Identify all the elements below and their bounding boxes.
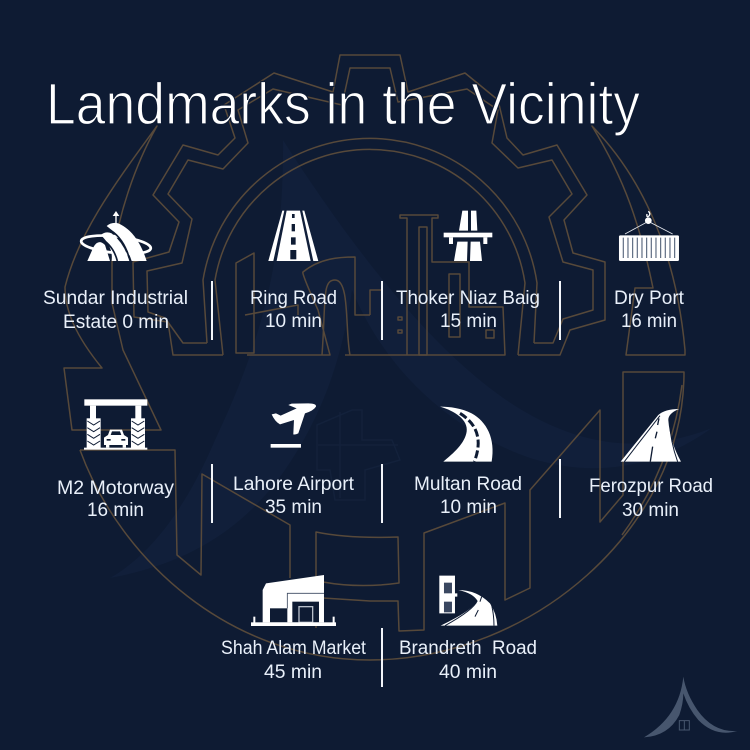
icon: Multan curved road bbox=[440, 407, 493, 462]
label: Sundar Industrial Estate bbox=[43, 288, 188, 333]
icon: M2 motorway toll bbox=[84, 399, 147, 450]
label: Dry Port bbox=[614, 288, 685, 332]
label: Multan Road: 10 min bbox=[440, 497, 497, 518]
label: Sundar Industrial Estate: Estate 0 min bbox=[63, 312, 169, 333]
label: Lahore Airport: 35 min bbox=[265, 497, 322, 518]
label: Shah Alam Market: Shah Alam Market bbox=[221, 638, 367, 659]
label: Shah Alam Market: 45 min bbox=[264, 662, 322, 683]
label: Thoker Niaz Baig: Thoker Niaz Baig bbox=[396, 288, 540, 309]
label: Shah Alam Market bbox=[221, 638, 367, 683]
label: Lahore Airport bbox=[233, 474, 355, 518]
label: Ferozpur Road: Ferozpur Road bbox=[589, 476, 713, 497]
gear outer outline bbox=[133, 55, 605, 355]
gear and skyline outline watermark bbox=[64, 55, 685, 660]
icon: shipping container bbox=[619, 211, 679, 261]
label: Ferozpur Road: 30 min bbox=[622, 500, 679, 521]
outer sweeping arcs, left bbox=[64, 126, 161, 430]
skyline buildings bbox=[236, 253, 370, 355]
label: Sundar Industrial Estate: Sundar Industrial bbox=[43, 288, 188, 309]
outer sweeping arcs, right bbox=[592, 126, 685, 355]
icon: industrial estate bbox=[80, 211, 152, 261]
label: Ferozpur Road bbox=[589, 476, 713, 521]
label: Brandreth Road: Brandreth Road bbox=[399, 638, 537, 659]
label: Thoker Niaz Baig bbox=[396, 288, 540, 332]
label: Brandreth Road: 40 min bbox=[439, 662, 497, 683]
icon: Brandreth road bbox=[439, 576, 497, 626]
label: Ring Road: Ring Road bbox=[250, 288, 337, 309]
icon: airplane bbox=[271, 403, 316, 448]
icon: ring road bbox=[268, 211, 318, 261]
icon: motorway bridge bbox=[444, 211, 492, 261]
label: Ring Road: 10 min bbox=[265, 311, 322, 332]
icon: corner logo bbox=[644, 677, 737, 737]
label: M2 Motorway: M2 Motorway bbox=[57, 478, 175, 499]
inner ring arcs bbox=[203, 138, 537, 343]
gear inner outline bbox=[147, 68, 593, 343]
label: Brandreth Road bbox=[399, 638, 537, 683]
large lower arc and columns bbox=[80, 450, 290, 578]
label: Multan Road: Multan Road bbox=[414, 474, 522, 495]
label: M2 Motorway: 16 min bbox=[87, 500, 144, 521]
label: M2 Motorway bbox=[57, 478, 175, 521]
faint background logo bbox=[110, 140, 712, 578]
label: Lahore Airport: Lahore Airport bbox=[233, 474, 355, 495]
icon: Ferozpur road bbox=[621, 409, 681, 462]
icon: Shah Alam market building bbox=[251, 575, 336, 626]
vertical dividers bbox=[211, 281, 561, 687]
label: Dry Port: Dry Port bbox=[614, 288, 685, 309]
label: Ring Road bbox=[250, 288, 337, 332]
label: Thoker Niaz Baig: 15 min bbox=[440, 311, 497, 332]
title: Landmarks in the Vicinity bbox=[46, 72, 640, 137]
label: Multan Road bbox=[414, 474, 522, 518]
label: Dry Port: 16 min bbox=[621, 311, 677, 332]
